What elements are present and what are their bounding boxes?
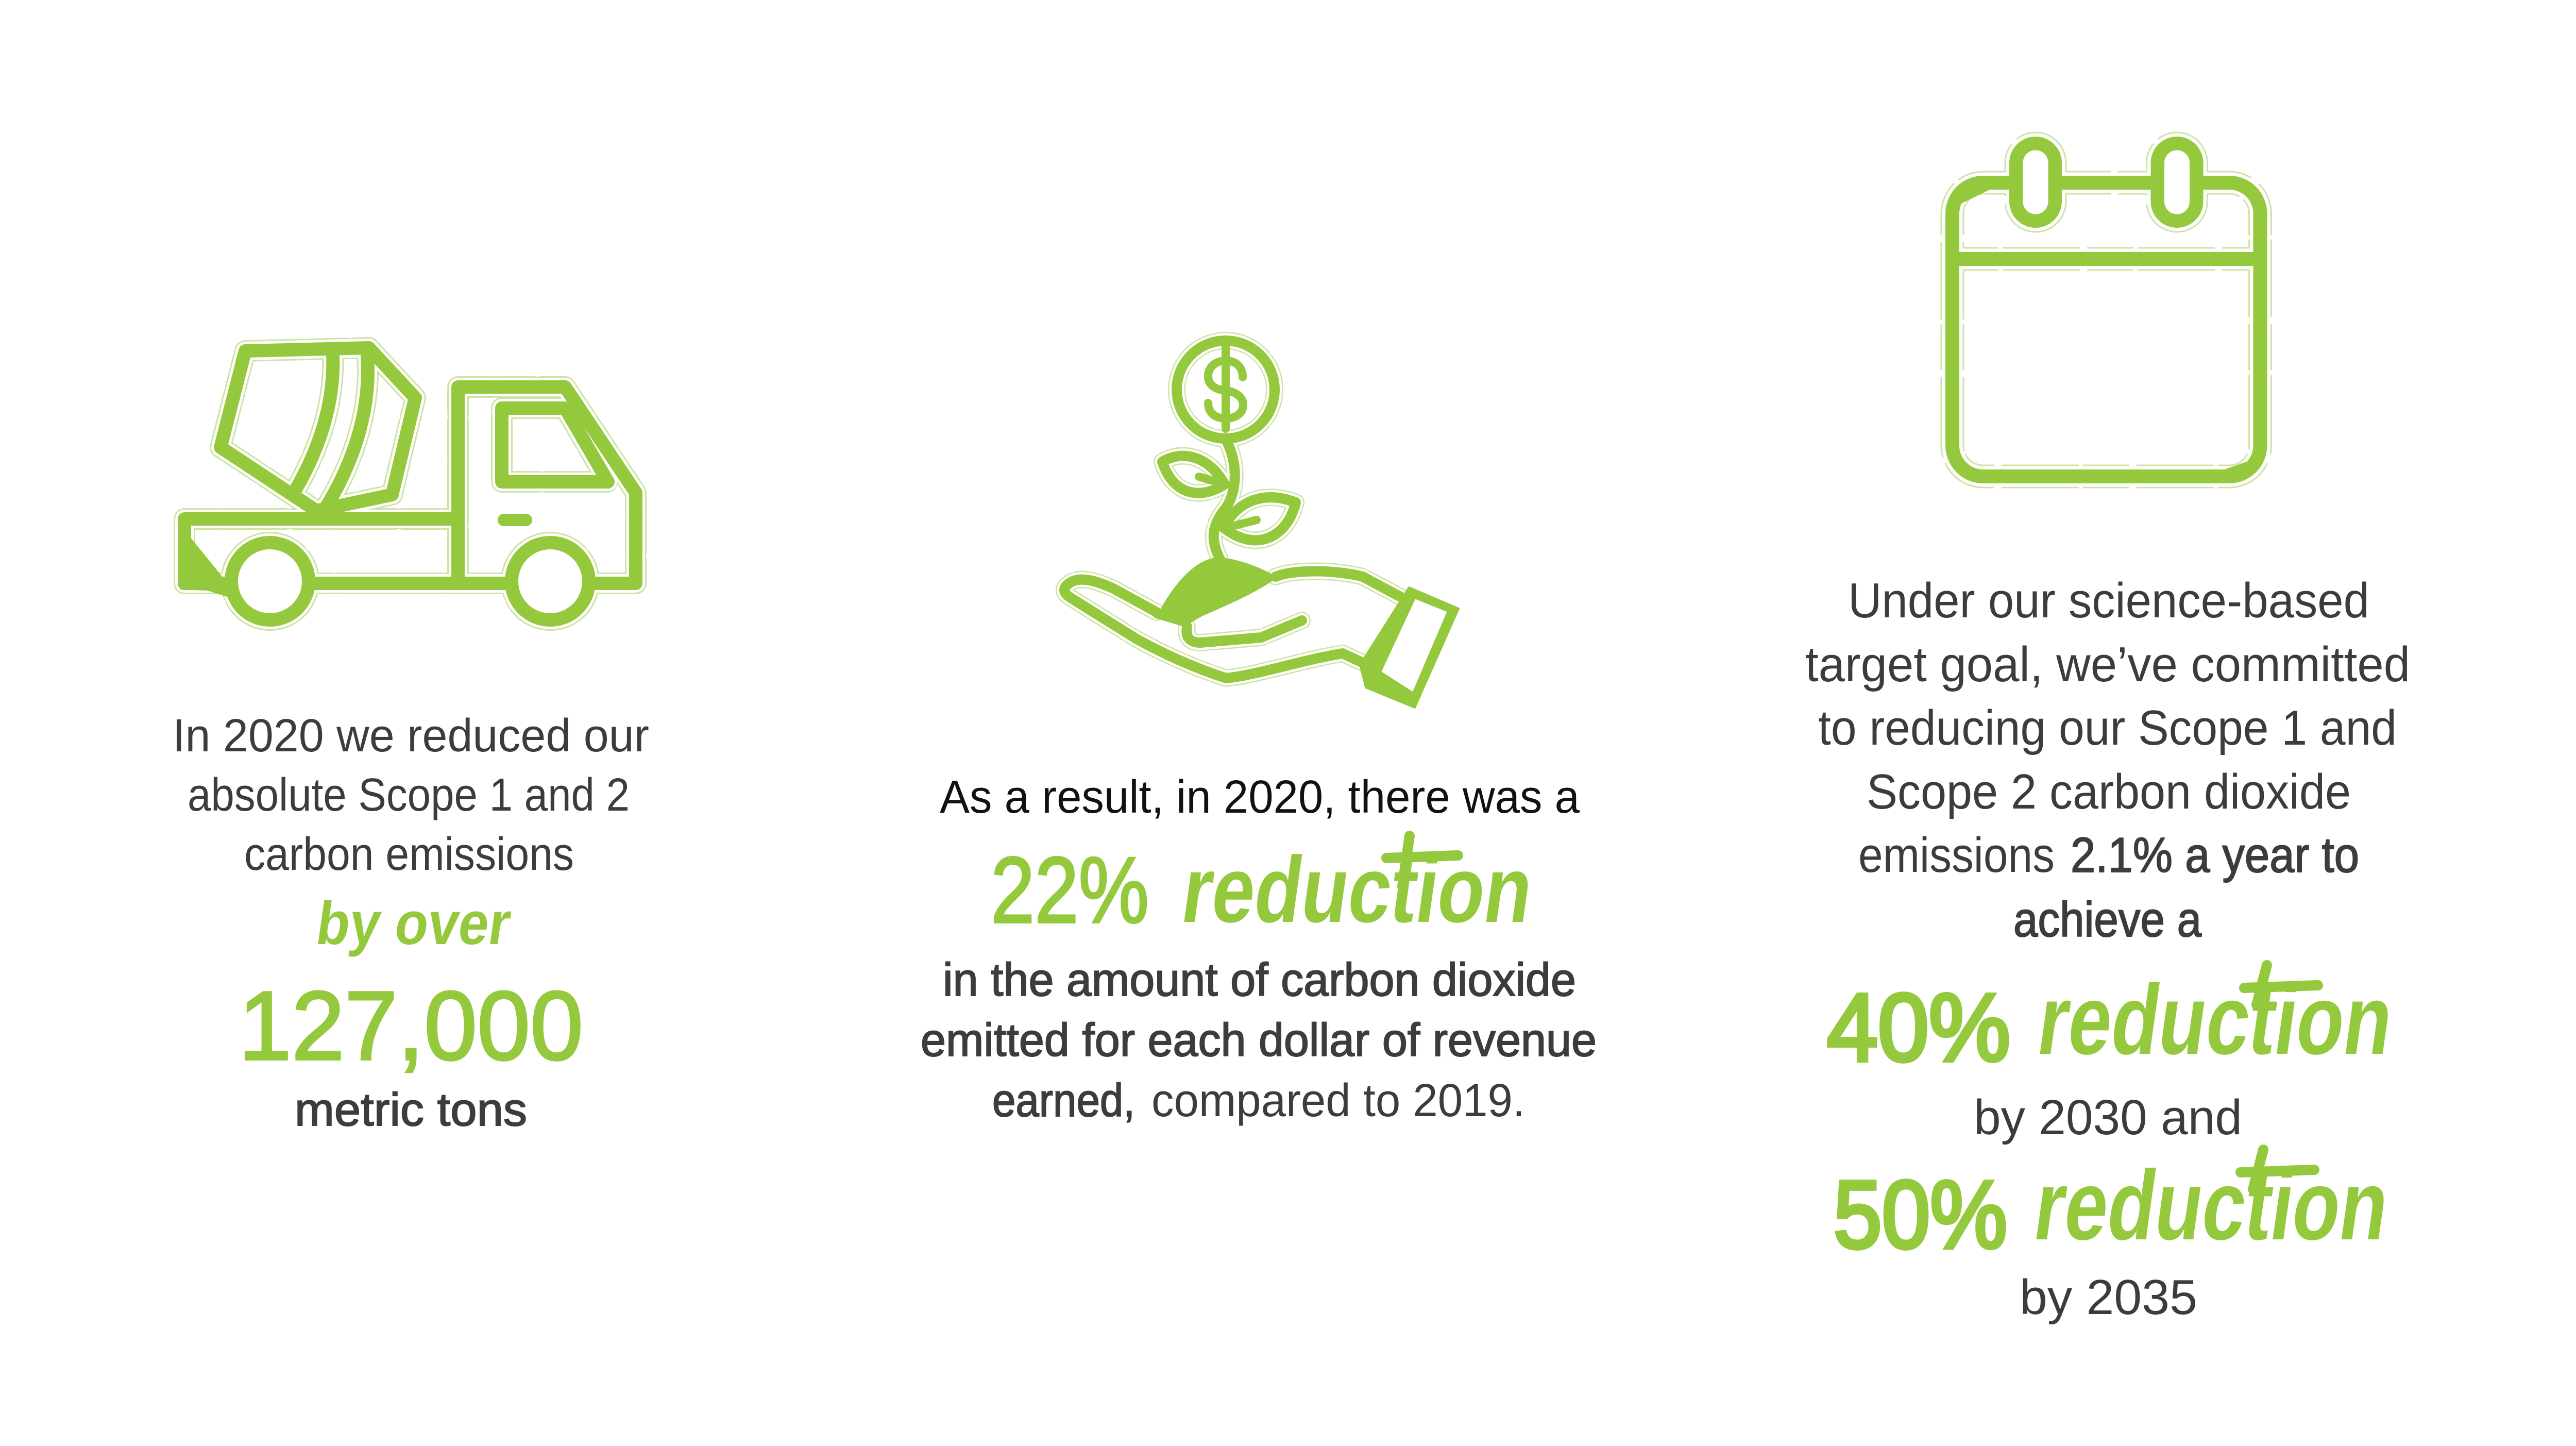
text: intro: In 2020 we reduced our — [173, 710, 649, 762]
text: by 2035: by 2035 — [2020, 1270, 2197, 1325]
text: intro — [173, 710, 649, 880]
text: as a result: As a result, in 2020, there was a — [940, 771, 1580, 823]
text: metric tons: metric tons — [295, 1084, 527, 1136]
number: 22% reduction: reduction — [1176, 837, 1539, 942]
text: target description — [1805, 573, 2410, 947]
icon: cement mixer truck — [180, 348, 636, 620]
number: 127,000: 127,000 — [239, 971, 583, 1081]
text: target description: to reducing our Scope 1 and — [1818, 700, 2397, 755]
text: target description: achieve a — [2013, 892, 2202, 947]
icon: calendar — [1952, 143, 2260, 476]
number: 50% reduction — [1834, 1150, 2396, 1268]
number: 22% reduction: 22% — [991, 837, 1149, 943]
number: 40% reduction: 40% — [1827, 974, 2010, 1081]
text: amount of carbon dioxide: compared to 2019. — [1151, 1075, 1525, 1126]
text: target description: target goal, we’ve committed — [1805, 637, 2410, 692]
panel: absolute emissions reduction — [173, 348, 649, 1136]
text: intro: absolute Scope 1 and 2 — [188, 769, 630, 821]
text: target description: emissions — [1858, 828, 2055, 883]
text: amount of carbon dioxide — [921, 954, 1597, 1126]
text: target description: 2.1% a year to — [2071, 828, 2359, 883]
text: target description: Under our science-based — [1848, 573, 2369, 628]
panel: carbon intensity reduction — [921, 341, 1597, 1126]
panel: science-based target — [1805, 143, 2410, 1325]
text: by 2030 and: by 2030 and — [1974, 1090, 2242, 1145]
text: amount of carbon dioxide: emitted for each dollar of revenue — [921, 1015, 1597, 1066]
number: 50% reduction: 50% — [1834, 1162, 2007, 1268]
number: 40% reduction — [1827, 964, 2400, 1081]
text: intro: carbon emissions — [244, 829, 574, 880]
number: 22% reduction — [991, 836, 1539, 943]
icon: hand holding money plant — [1064, 341, 1459, 708]
number: 40% reduction: reduction — [2031, 964, 2400, 1075]
number: 50% reduction: reduction — [2028, 1150, 2396, 1260]
text: amount of carbon dioxide: in the amount of carbon dioxide — [943, 954, 1576, 1006]
text: amount of carbon dioxide: earned, — [992, 1075, 1135, 1126]
text: by over: by over — [312, 890, 515, 957]
text: target description: Scope 2 carbon dioxide — [1867, 764, 2351, 819]
